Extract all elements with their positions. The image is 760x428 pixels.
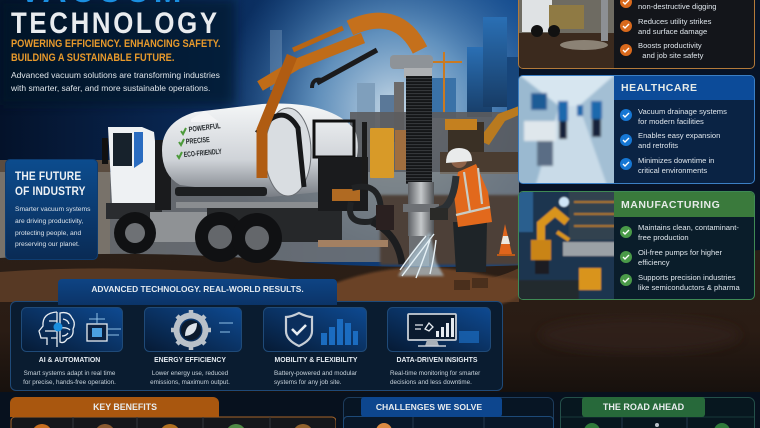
panel: healthcare — [518, 75, 755, 184]
panel: construction — [518, 0, 755, 69]
ground — [0, 160, 760, 428]
panel heading: OF INDUSTRY — [15, 184, 86, 198]
excavator background — [440, 106, 519, 174]
construction text: Reduces utility strikes — [638, 17, 711, 26]
healthcare bullets — [620, 109, 632, 170]
panel body: preserving our planet. — [15, 241, 80, 248]
card: energy efficiency — [144, 307, 242, 386]
construction text — [638, 2, 717, 60]
benefits tab — [10, 397, 219, 417]
construction text: Boosts productivity — [638, 41, 702, 50]
shield icon — [263, 307, 367, 352]
traffic cone — [497, 224, 515, 256]
AI description — [23, 370, 116, 386]
construction text: and surface damage — [638, 27, 707, 36]
vacuum truck — [102, 104, 402, 264]
data description — [390, 370, 480, 386]
challenges tab: CHALLENGES WE SOLVE — [376, 402, 482, 412]
card: mobility and flexibility — [263, 307, 367, 386]
monitor icon — [387, 307, 491, 352]
manufacturing header — [613, 192, 756, 217]
advanced heading tab — [58, 279, 337, 305]
panel: challenges we solve — [343, 397, 554, 428]
intro text — [11, 70, 220, 93]
data title: DATA-DRIVEN INSIGHTS — [397, 357, 477, 364]
panel: manufacturing — [518, 191, 755, 300]
construction text: and job site safety — [642, 51, 703, 60]
challenges tab — [361, 397, 502, 417]
panel: key benefits — [10, 397, 336, 428]
data description: decisions and less downtime. — [390, 379, 472, 386]
cards container — [10, 301, 503, 391]
manufacturing photo — [519, 192, 614, 299]
healthcare text: critical environments — [638, 166, 707, 175]
intro text: Advanced vacuum solutions are transforming industries — [11, 70, 220, 80]
healthcare header — [613, 76, 756, 100]
panel body — [15, 206, 90, 248]
manufacturing text — [638, 223, 740, 292]
truck tank labels: POWERFUL — [188, 121, 221, 134]
healthcare text: Minimizes downtime in — [638, 156, 714, 165]
panel: the road ahead — [560, 397, 755, 428]
truck tank labels: ECO-FRIENDLY — [183, 147, 222, 159]
benefits tab: KEY BENEFITS — [93, 402, 157, 412]
healthcare text: Enables easy expansion — [638, 131, 720, 140]
manufacturing text: free production — [638, 233, 689, 242]
title — [11, 0, 220, 40]
road body — [560, 397, 755, 428]
panel body: protecting people, and — [15, 230, 81, 237]
manufacturing text: efficiency — [638, 258, 670, 267]
manufacturing heading: MANUFACTURING — [621, 199, 720, 211]
healthcare text — [638, 107, 727, 175]
healthcare heading: HEALTHCARE — [621, 82, 698, 94]
panel heading: THE FUTURE — [15, 169, 81, 183]
construction bullets — [620, 0, 632, 56]
intro text: with smarter, safer, and more sustainable operations. — [11, 83, 210, 93]
energy description: Lower energy use, reduced — [152, 370, 228, 377]
construction photo — [519, 0, 614, 68]
road tab: THE ROAD AHEAD — [603, 402, 684, 412]
mobility description — [274, 370, 357, 386]
worker — [430, 148, 492, 290]
panel body: Smarter vacuum systems — [15, 206, 90, 213]
energy description: emissions, maximum output. — [150, 379, 230, 386]
AI icon — [21, 307, 123, 352]
panel body: are driving productivity, — [15, 218, 83, 225]
card: AI and automation — [21, 307, 123, 386]
advanced heading tab: ADVANCED TECHNOLOGY. REAL-WORLD RESULTS. — [91, 284, 304, 294]
healthcare text: and retrofits — [638, 141, 678, 150]
manufacturing text: Oil-free pumps for higher — [638, 248, 722, 257]
truck tank labels: PRECISE — [185, 135, 210, 146]
manufacturing text: Maintains clean, contaminant- — [638, 223, 739, 232]
manufacturing text: Supports precision industries — [638, 273, 736, 282]
energy title: ENERGY EFFICIENCY — [154, 357, 226, 364]
challenges body — [343, 397, 554, 428]
AI title: AI & AUTOMATION — [39, 357, 100, 364]
panel: the future of industry — [5, 159, 98, 260]
orange tagline: BUILDING A SUSTAINABLE FUTURE. — [11, 52, 174, 64]
data description: Real-time monitoring for smarter — [390, 370, 480, 377]
orange tagline — [11, 38, 220, 64]
benefits body — [10, 416, 336, 428]
mobility description: systems for any job site. — [274, 379, 342, 386]
energy description — [150, 370, 230, 386]
mobility title: MOBILITY & FLEXIBILITY — [275, 357, 357, 364]
water splash — [398, 232, 444, 278]
panel heading — [15, 169, 86, 198]
card: data-driven insights — [387, 307, 491, 386]
manufacturing text: like semiconductors & pharma — [638, 283, 740, 292]
construction text: non-destructive digging — [638, 2, 717, 11]
truck tank labels — [177, 121, 222, 159]
mobility description: Battery-powered and modular — [274, 370, 357, 377]
healthcare photo — [519, 76, 614, 183]
orange boom and hose — [260, 21, 439, 266]
AI description: Smart systems adapt in real time — [24, 370, 115, 377]
road tab — [582, 397, 705, 417]
healthcare text: for modern facilities — [638, 117, 704, 126]
healthcare text: Vacuum drainage systems — [638, 107, 727, 116]
title line: technology: TECHNOLOGY — [11, 7, 220, 40]
gear leaf icon — [144, 307, 242, 352]
manufacturing bullets — [620, 226, 632, 286]
orange tagline: POWERING EFFICIENCY. ENHANCING SAFETY. — [11, 38, 220, 50]
city skyline — [270, 17, 519, 172]
AI description: for precise, hands-free operation. — [23, 379, 116, 386]
panel: advanced technology — [10, 279, 503, 391]
